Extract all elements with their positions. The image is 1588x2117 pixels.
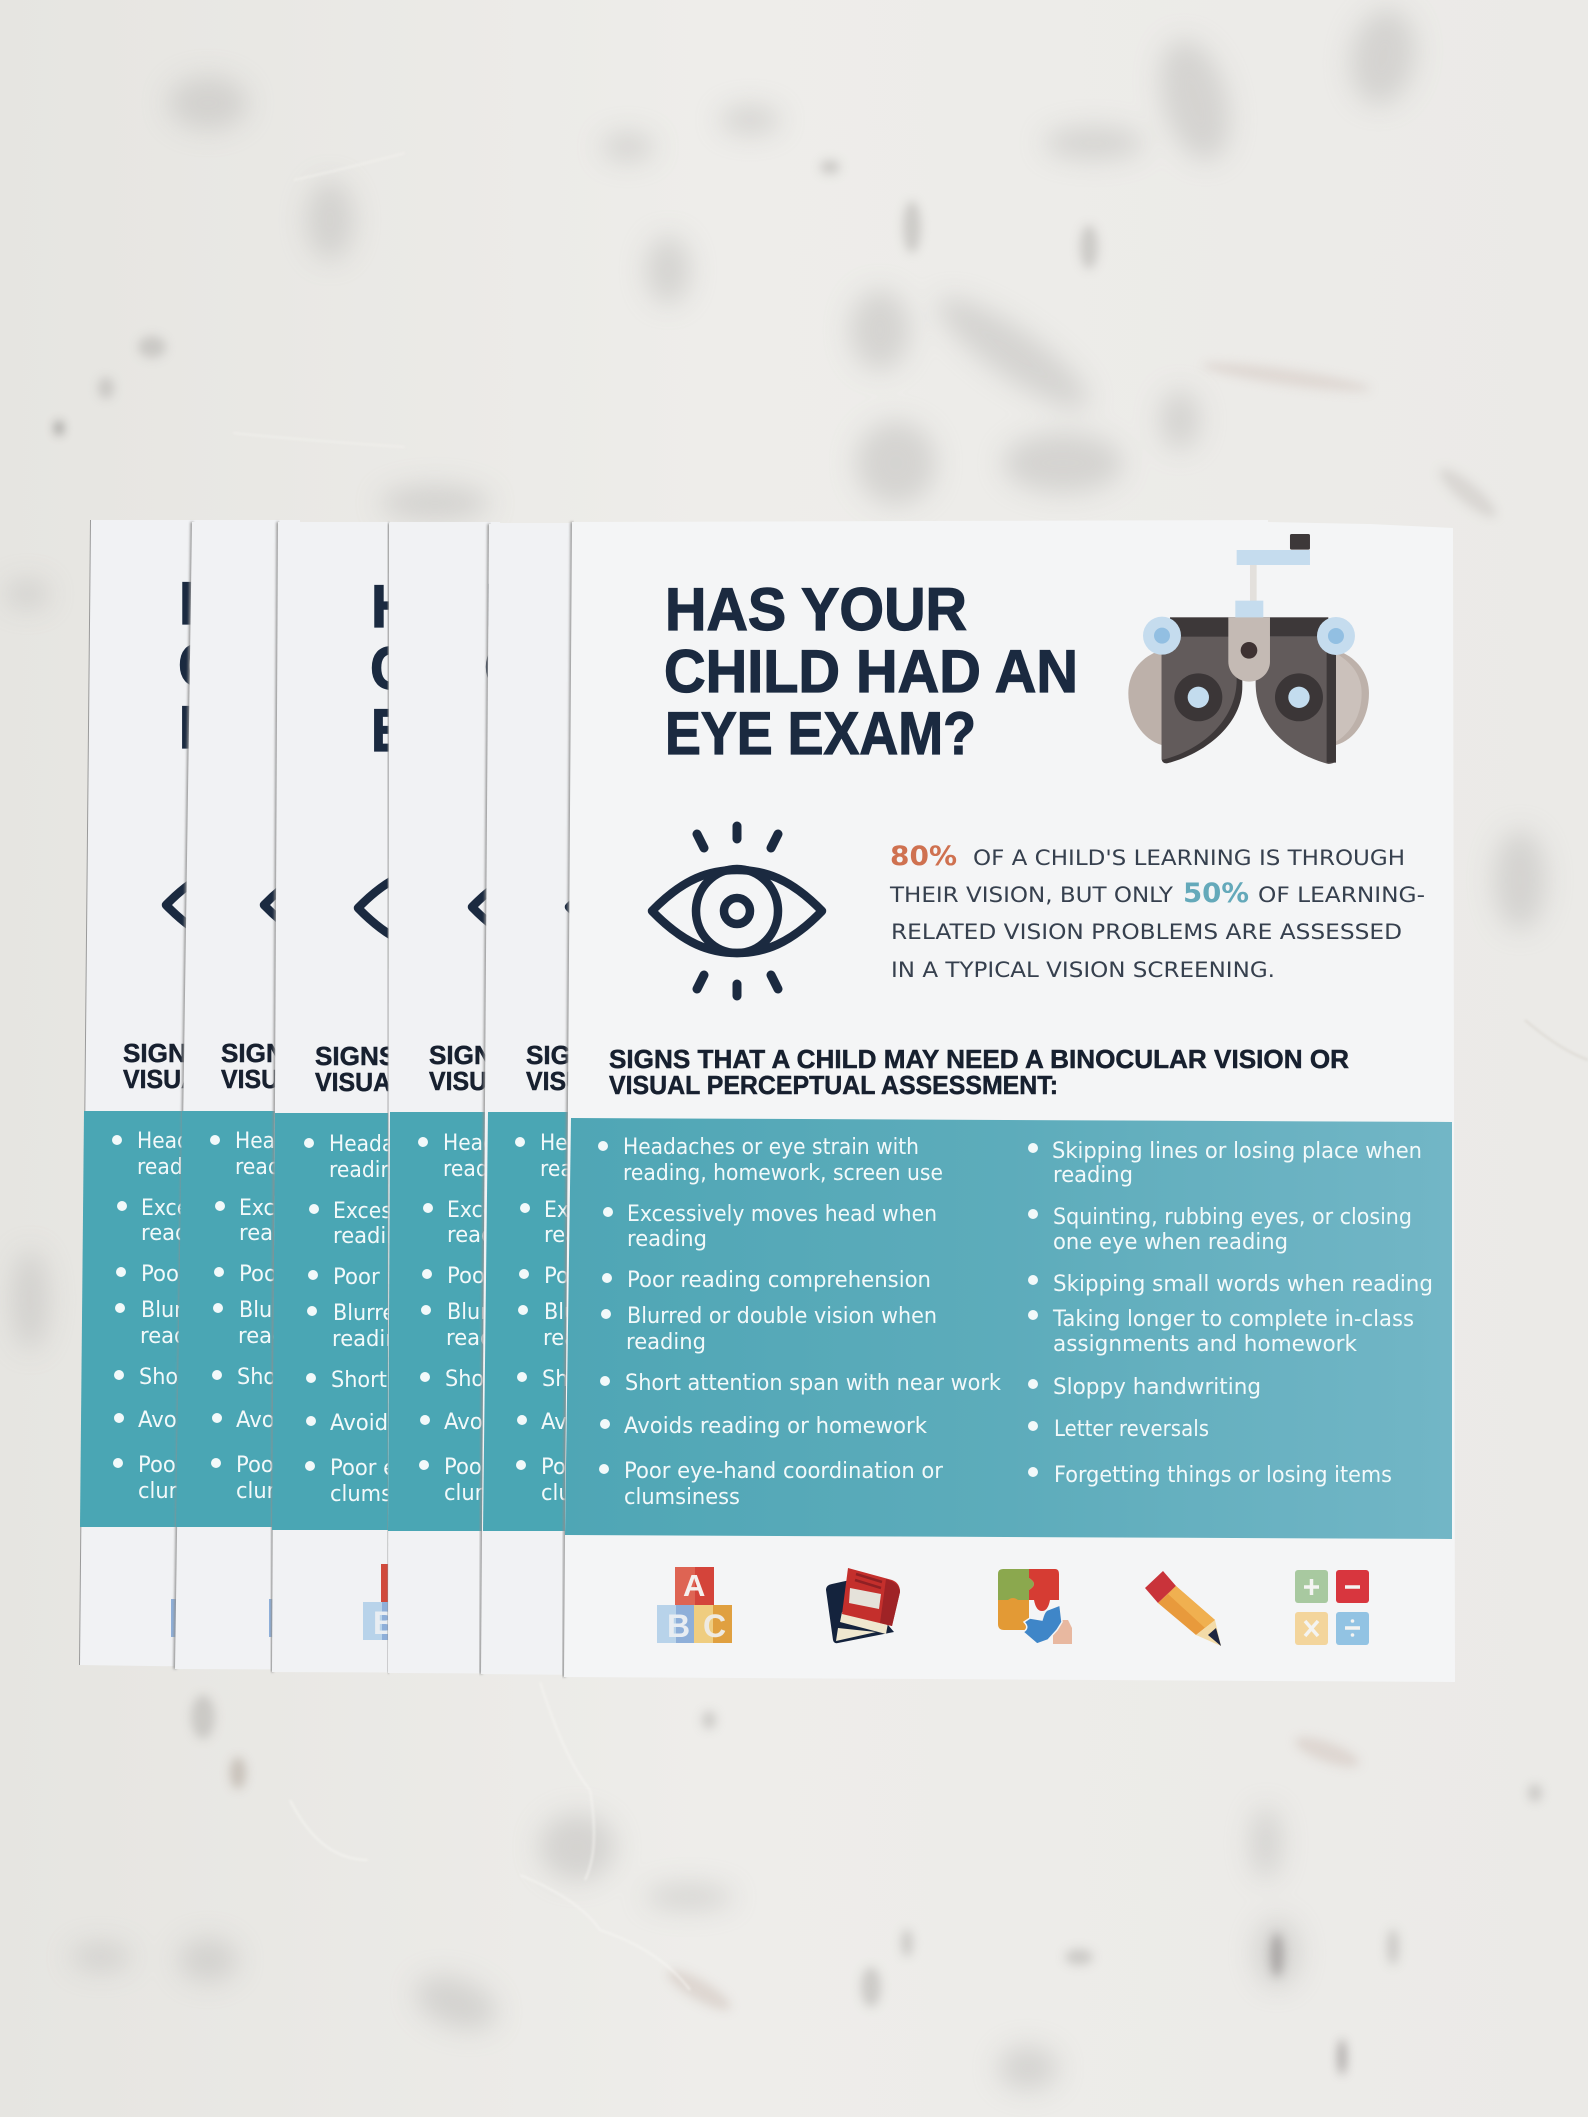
stacked sheet 5: SIGNS THAT A CHILD MAY NEED A BINOCULAR VISION OR bbox=[526, 1040, 1266, 1070]
stacked sheet 5: reading, homework, screen use bbox=[540, 1157, 860, 1182]
stacked sheet 3: Poor reading comprehension bbox=[333, 1265, 637, 1290]
front sheet bbox=[564, 520, 1455, 1682]
stacked sheet 2: Blurred or double vision when bbox=[239, 1298, 549, 1323]
right column of signs: Taking longer to complete in-class bbox=[1052, 1307, 1414, 1332]
stacked sheet 4: VISUAL PERCEPTUAL ASSESSMENT: bbox=[429, 1066, 878, 1096]
icon: pencil bbox=[1145, 1571, 1221, 1646]
stacked sheet 1: VISUAL PERCEPTUAL ASSESSMENT: bbox=[123, 1064, 572, 1094]
stacked sheet 2: VISUAL PERCEPTUAL ASSESSMENT: bbox=[221, 1064, 670, 1094]
stacked sheet 2 bbox=[175, 522, 961, 1670]
right column of signs: one eye when reading bbox=[1053, 1230, 1288, 1255]
statistics paragraph: OF A CHILD'S LEARNING IS THROUGH bbox=[973, 846, 1405, 871]
stacked sheet 4: clumsiness bbox=[444, 1481, 560, 1506]
icon: math symbols bbox=[1295, 1570, 1369, 1645]
stacked sheet 3: Headaches or eye strain with bbox=[329, 1132, 625, 1157]
stacked sheet 3: Blurred or double vision when bbox=[333, 1301, 643, 1326]
stacked sheet 5 bbox=[481, 524, 1266, 1676]
stacked sheet 2: reading bbox=[239, 1221, 319, 1246]
left column of signs: Excessively moves head when bbox=[627, 1202, 937, 1227]
right column of signs: Sloppy handwriting bbox=[1053, 1375, 1261, 1400]
stacked sheet 5: Short attention span with near work bbox=[542, 1367, 918, 1392]
stacked sheet 4: Headaches or eye strain with bbox=[443, 1131, 739, 1156]
stacked sheet 3: B bbox=[373, 1605, 396, 1641]
stacked sheet 4: reading bbox=[446, 1326, 526, 1351]
stacked sheet 5: Poor reading comprehension bbox=[544, 1264, 848, 1289]
icon: alphabet blocks: C bbox=[703, 1608, 726, 1644]
stacked sheet 2: Excessively moves head when bbox=[239, 1196, 549, 1221]
stacked sheet 3: SIGNS THAT A CHILD MAY NEED A BINOCULAR VISION OR bbox=[315, 1041, 1055, 1071]
stacked sheet 1: EYE EXAM? bbox=[179, 694, 490, 761]
stacked sheet 3: reading bbox=[332, 1327, 412, 1352]
left column of signs: reading bbox=[626, 1330, 706, 1355]
left column of signs: reading bbox=[627, 1227, 707, 1252]
stacked sheet 1: Poor reading comprehension bbox=[141, 1262, 445, 1287]
stacked sheet 2: Short attention span with near work bbox=[237, 1365, 613, 1390]
stacked sheet 2: Poor eye-hand coordination or bbox=[236, 1453, 556, 1478]
stacked sheet 4: Blurred or double vision when bbox=[447, 1300, 757, 1325]
stacked sheet 1: reading bbox=[140, 1324, 220, 1349]
stacked sheet 5: Excessively moves head when bbox=[544, 1198, 854, 1223]
icon: alphabet blocks bbox=[657, 1567, 732, 1644]
left column of signs: clumsiness bbox=[624, 1485, 740, 1510]
stacked sheet 2: Avoids reading or homework bbox=[236, 1408, 539, 1433]
right column of signs: Squinting, rubbing eyes, or closing bbox=[1053, 1205, 1412, 1230]
statistics paragraph: IN A TYPICAL VISION SCREENING. bbox=[891, 958, 1275, 983]
right column of signs: Forgetting things or losing items bbox=[1054, 1463, 1392, 1488]
subheading: SIGNS THAT A CHILD MAY NEED A BINOCULAR VISION OR bbox=[609, 1044, 1349, 1074]
icon: alphabet blocks: A bbox=[683, 1568, 705, 1603]
left column of signs: Headaches or eye strain with bbox=[623, 1135, 919, 1160]
stacked sheet 1: Avoids reading or homework bbox=[138, 1408, 441, 1433]
stacked sheet 4 bbox=[388, 523, 1169, 1674]
stacked sheet 1: CHILD HAD AN bbox=[178, 632, 592, 699]
stacked sheet 5: Headaches or eye strain with bbox=[540, 1131, 836, 1156]
stacked sheet 1: reading, homework, screen use bbox=[137, 1155, 457, 1180]
right column of signs: reading bbox=[1053, 1163, 1133, 1188]
subheading: VISUAL PERCEPTUAL ASSESSMENT: bbox=[609, 1070, 1058, 1100]
icon: phoropter bbox=[1128, 534, 1369, 764]
stacked sheet 4: SIGNS THAT A CHILD MAY NEED A BINOCULAR VISION OR bbox=[429, 1040, 1169, 1070]
statistics paragraph: 50% bbox=[1183, 878, 1249, 909]
right column of signs: Skipping small words when reading bbox=[1053, 1272, 1433, 1297]
right column of signs: Letter reversals bbox=[1054, 1417, 1209, 1442]
stacked sheet 2: Headaches or eye strain with bbox=[235, 1129, 531, 1154]
stacked sheet 3: clumsiness bbox=[330, 1482, 446, 1507]
statistics paragraph bbox=[889, 841, 1425, 983]
stacked sheet 3: reading, homework, screen use bbox=[329, 1158, 649, 1183]
icon: puzzle bbox=[998, 1569, 1072, 1644]
right column of signs: Skipping lines or losing place when bbox=[1052, 1139, 1422, 1164]
stacked sheet 4: Short attention span with near work bbox=[445, 1367, 821, 1392]
stacked sheet 5: Avoids reading or homework bbox=[541, 1410, 844, 1435]
stacked sheet 4: reading, homework, screen use bbox=[443, 1157, 763, 1182]
left column of signs: Short attention span with near work bbox=[625, 1371, 1001, 1396]
title: CHILD HAD AN bbox=[664, 638, 1078, 705]
stacked sheet 3: Short attention span with near work bbox=[331, 1368, 707, 1393]
subheading bbox=[609, 1044, 1349, 1100]
stacked sheet 3: reading bbox=[333, 1224, 413, 1249]
stacked sheet 4: Poor reading comprehension bbox=[447, 1264, 751, 1289]
stacked sheet 1: reading bbox=[141, 1221, 221, 1246]
title: HAS YOUR bbox=[665, 576, 967, 643]
stacked sheet 4: EYE EXAM? bbox=[485, 696, 796, 763]
stacked sheet 1: clumsiness bbox=[138, 1479, 254, 1504]
stacked sheet 5: reading bbox=[543, 1326, 623, 1351]
stacked sheet 3: CHILD HAD AN bbox=[370, 635, 784, 702]
right column of signs: assignments and homework bbox=[1053, 1332, 1357, 1357]
statistics paragraph: RELATED VISION PROBLEMS ARE ASSESSED bbox=[891, 920, 1402, 945]
statistics paragraph: 80% bbox=[890, 841, 957, 872]
stacked sheet 2: reading, homework, screen use bbox=[235, 1155, 555, 1180]
right column of signs bbox=[1028, 1139, 1433, 1488]
stacked sheet 4: CHILD HAD AN bbox=[484, 634, 898, 701]
stacked sheet 2: Poor reading comprehension bbox=[239, 1262, 543, 1287]
left column of signs: Poor eye-hand coordination or bbox=[624, 1459, 944, 1484]
stacked sheet 3: HAS YOUR bbox=[371, 573, 673, 640]
left column of signs: reading, homework, screen use bbox=[623, 1161, 943, 1186]
stacked sheet 4: Excessively moves head when bbox=[447, 1198, 757, 1223]
stacked sheet 1: Poor eye-hand coordination or bbox=[138, 1453, 458, 1478]
statistics paragraph: OF LEARNING- bbox=[1258, 883, 1425, 908]
stacked sheet 5: VISUAL PERCEPTUAL ASSESSMENT: bbox=[526, 1066, 975, 1096]
icon: alphabet blocks: B bbox=[667, 1608, 690, 1644]
icon: eye bbox=[652, 826, 822, 996]
statistics paragraph: THEIR VISION, BUT ONLY bbox=[889, 883, 1174, 908]
stacked sheet 4: Poor eye-hand coordination or bbox=[444, 1455, 764, 1480]
stacked sheet 5: Poor eye-hand coordination or bbox=[541, 1455, 861, 1480]
stacked sheet 2: SIGNS THAT A CHILD MAY NEED A BINOCULAR VISION OR bbox=[221, 1038, 961, 1068]
stacked sheet 5: clumsiness bbox=[541, 1481, 657, 1506]
title bbox=[664, 576, 1078, 767]
stacked sheet 3: Avoids reading or homework bbox=[330, 1411, 633, 1436]
stacked sheet 4: HAS YOUR bbox=[485, 572, 787, 639]
left column of signs: Poor reading comprehension bbox=[627, 1268, 931, 1293]
stacked sheet 2: clumsiness bbox=[236, 1479, 352, 1504]
stacked sheet 1: SIGNS THAT A CHILD MAY NEED A BINOCULAR VISION OR bbox=[123, 1038, 863, 1068]
stacked sheet 5: reading bbox=[544, 1223, 624, 1248]
left column of signs: Blurred or double vision when bbox=[627, 1304, 937, 1329]
stacked sheet 3: VISUAL PERCEPTUAL ASSESSMENT: bbox=[315, 1067, 764, 1097]
stacked sheet 5: Blurred or double vision when bbox=[544, 1300, 854, 1325]
left column of signs: Avoids reading or homework bbox=[624, 1414, 927, 1439]
stacked sheet 1: Excessively moves head when bbox=[141, 1196, 451, 1221]
left column of signs bbox=[598, 1135, 1001, 1510]
stacked sheet 4: reading bbox=[447, 1223, 527, 1248]
stacked sheet 4: Avoids reading or homework bbox=[444, 1410, 747, 1435]
stacked sheet 3: Excessively moves head when bbox=[333, 1199, 643, 1224]
icon: books bbox=[826, 1568, 900, 1643]
stacked sheet 1: Short attention span with near work bbox=[139, 1365, 515, 1390]
stacked sheet 3 bbox=[272, 522, 1055, 1673]
stacked sheet 1 bbox=[80, 520, 863, 1668]
stacked sheet 2: reading bbox=[238, 1324, 318, 1349]
panel: teal signs list bbox=[565, 1118, 1452, 1539]
stacked sheet 1: Headaches or eye strain with bbox=[137, 1129, 433, 1154]
stacked sheet 1: Blurred or double vision when bbox=[141, 1298, 451, 1323]
stacked sheet 1: HAS YOUR bbox=[179, 570, 481, 637]
stacked sheet 3: Poor eye-hand coordination or bbox=[330, 1456, 650, 1481]
title: EYE EXAM? bbox=[665, 700, 976, 767]
stacked sheet 3: EYE EXAM? bbox=[371, 697, 682, 764]
